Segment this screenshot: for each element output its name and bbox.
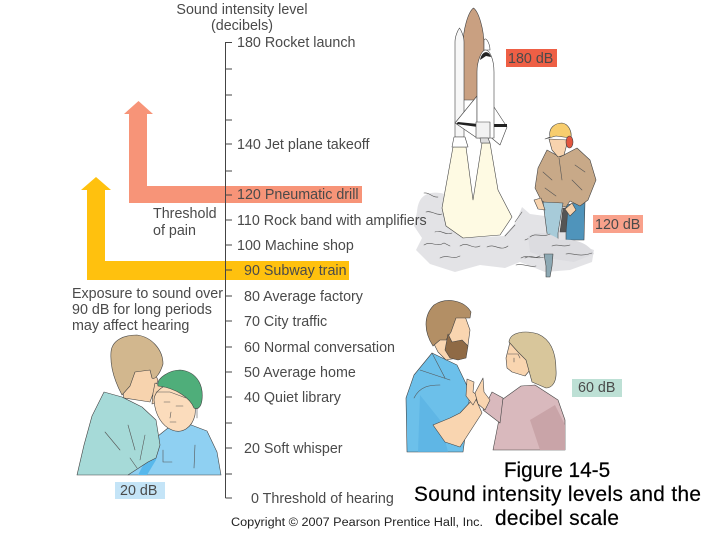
woman face (506, 340, 530, 376)
60 dB label (572, 379, 622, 397)
exposure note (72, 286, 223, 334)
illustration: whispering boys (77, 335, 221, 475)
jackhammer (543, 202, 563, 246)
exhaust plumes (442, 143, 512, 238)
external tank (463, 8, 484, 100)
figure caption: Figure 14-5 (504, 459, 610, 482)
boosters (455, 28, 464, 137)
smoke cloud (414, 193, 594, 272)
exposure note: may affect hearing (72, 318, 189, 334)
arrow: hearing damage exposure (81, 177, 349, 280)
illustration: worker with drill (521, 123, 596, 277)
man head (432, 306, 470, 360)
jeans (566, 201, 585, 240)
scale labels: 180 Rocket launch (237, 35, 355, 51)
man beard (445, 334, 468, 360)
figure caption: decibel scale (495, 507, 619, 530)
figure caption: Sound intensity levels and the (414, 483, 701, 506)
120 dB label: 120 dB (595, 217, 640, 233)
axis heading: (decibels) (211, 18, 273, 34)
scale labels: 80 Average factory (244, 289, 364, 305)
woman shirt (493, 385, 565, 450)
exposure note: Exposure to sound over (72, 286, 223, 302)
axis heading: Sound intensity level (176, 2, 308, 18)
scale labels: 90 Subway train (244, 263, 347, 279)
scale labels: 100 Machine shop (237, 238, 354, 254)
drill bit (544, 254, 553, 277)
illustration: man and woman talking (406, 301, 565, 452)
figure caption (414, 459, 701, 530)
jacket (535, 148, 596, 207)
man hair (426, 301, 471, 346)
ground smoke (528, 233, 594, 262)
scale labels: 40 Quiet library (244, 390, 342, 406)
hard hat (545, 123, 571, 139)
scale labels: 110 Rock band with amplifiers (237, 213, 427, 229)
180 dB label: 180 dB (508, 51, 553, 67)
scale labels: 20 Soft whisper (244, 441, 343, 457)
threshold of pain label: Threshold (153, 206, 217, 222)
man arm and hands (433, 397, 482, 447)
scale labels: 140 Jet plane takeoff (237, 137, 370, 153)
orbiter (477, 50, 494, 138)
arrow: threshold of pain (124, 101, 362, 203)
copyright: Copyright © 2007 Pearson Prentice Hall, Inc. (231, 517, 483, 529)
scale labels: 120 Pneumatic drill (237, 187, 359, 203)
face (549, 139, 568, 157)
threshold of pain label (153, 206, 217, 239)
hands (534, 198, 545, 210)
axis heading (176, 2, 308, 34)
woman hair (509, 332, 556, 388)
scale labels: 60 Normal conversation (244, 340, 395, 356)
scale labels: 0 Threshold of hearing (251, 491, 394, 507)
scale labels: 50 Average home (244, 365, 356, 381)
exposure note: 90 dB for long periods (72, 302, 212, 318)
wings (455, 96, 477, 138)
threshold of pain label: of pain (153, 223, 196, 239)
scale labels: 70 City traffic (244, 314, 327, 330)
woman hand (475, 378, 490, 410)
ear muff (566, 136, 573, 148)
20 dB label: 20 dB (120, 483, 157, 499)
60 dB label: 60 dB (578, 380, 615, 396)
illustration: rocket launch (414, 8, 594, 272)
scale labels (237, 35, 427, 507)
decibel scale axis (226, 42, 232, 498)
man shirt (406, 353, 470, 452)
